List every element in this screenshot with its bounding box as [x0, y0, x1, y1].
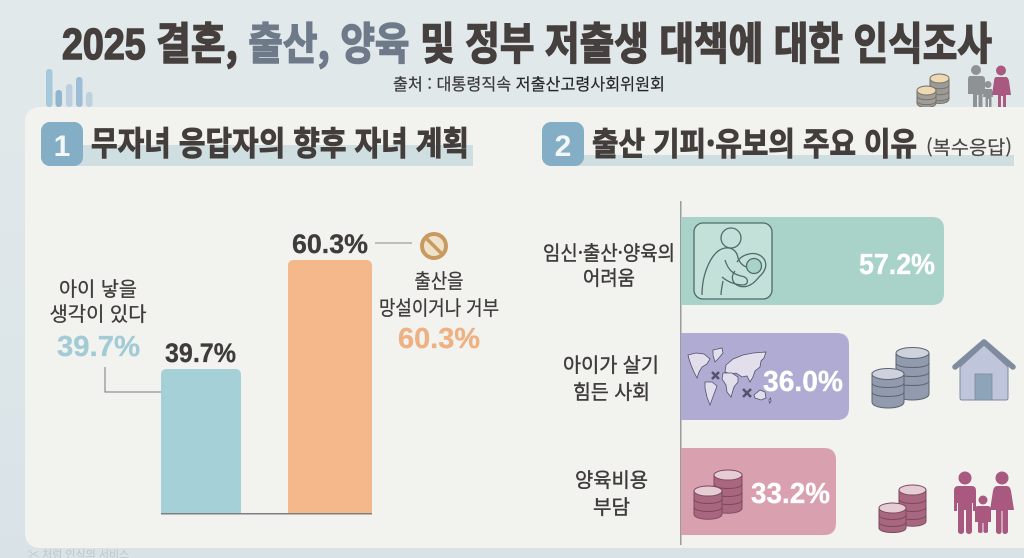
- reason label: pregnancy, birth, parenting difficulty: 어려움: [583, 262, 635, 291]
- callout: hesitate or refuse: [375, 234, 499, 355]
- callout: hesitate or refuse: 60.3%: [398, 323, 480, 355]
- icon: coins (rose): [879, 485, 926, 532]
- panel: main content card: [25, 107, 1024, 548]
- reason label: childcare cost burden: [575, 464, 648, 520]
- bar: 33.2%: 33.2%: [751, 478, 830, 510]
- bar: 33.2%: [681, 448, 836, 535]
- bar: 60.3%: [288, 260, 372, 513]
- callout: hesitate or refuse: 출산을: [414, 265, 464, 294]
- baseline: [161, 513, 372, 514]
- reason label: hard society to live in: 힘든 사회: [573, 376, 650, 405]
- icon: house: [955, 342, 1013, 400]
- reason label: childcare cost burden: 양육비용: [575, 464, 648, 493]
- reason label: hard society to live in: [563, 349, 659, 405]
- callout: hesitate or refuse: 망설이거나 거부: [379, 292, 499, 321]
- heading: section 2: 출산 기피·유보의 주요 이유: [592, 119, 917, 165]
- icon: family: [954, 472, 1014, 534]
- bar: 39.7%: [161, 369, 241, 513]
- reason label: childcare cost burden: 부담: [593, 491, 630, 520]
- heading: section 2: 2: [555, 130, 571, 163]
- icon: coins (slate): [872, 348, 929, 408]
- icon: decorative bar chart: [46, 69, 92, 107]
- reason label: hard society to live in: 아이가 살기: [563, 349, 659, 378]
- heading: section 2: (복수응답): [926, 133, 1012, 160]
- callout: intend to have children: 아이 낳을: [59, 273, 137, 302]
- callout: intend to have children: 생각이 있다: [50, 298, 146, 327]
- icon: coins in bar: [694, 470, 742, 519]
- value: 39.7%: 39.7%: [165, 338, 236, 368]
- icon: header family: [968, 65, 1011, 107]
- callout: intend to have children: 39.7%: [57, 331, 140, 363]
- bar: 57.2%: 57.2%: [859, 249, 935, 281]
- reason label: pregnancy, birth, parenting difficulty: [543, 237, 675, 291]
- heading: section 1: 무자녀 응답자의 향후 자녀 계획: [91, 117, 469, 165]
- icon: header coins: [917, 74, 949, 108]
- vertical axis: [680, 201, 682, 545]
- icon: parent holding baby: [694, 223, 772, 299]
- reason label: pregnancy, birth, parenting difficulty: 임신·출산·양육의: [543, 237, 675, 266]
- icon: prohibition sign: [422, 234, 446, 258]
- value: 60.3%: 60.3%: [292, 229, 368, 259]
- bar: 36.0%: 36.0%: [763, 366, 843, 398]
- bar: 57.2%: [681, 217, 944, 305]
- bar: 36.0%: [681, 333, 849, 420]
- bar chart: future child plans: [161, 229, 372, 514]
- heading: section 1: 1: [54, 130, 70, 163]
- source line: 출처 : 대통령직속 저출산고령사회위원회: [393, 71, 665, 95]
- callout: intend to have children: [50, 273, 161, 392]
- icon: world map: [688, 348, 771, 405]
